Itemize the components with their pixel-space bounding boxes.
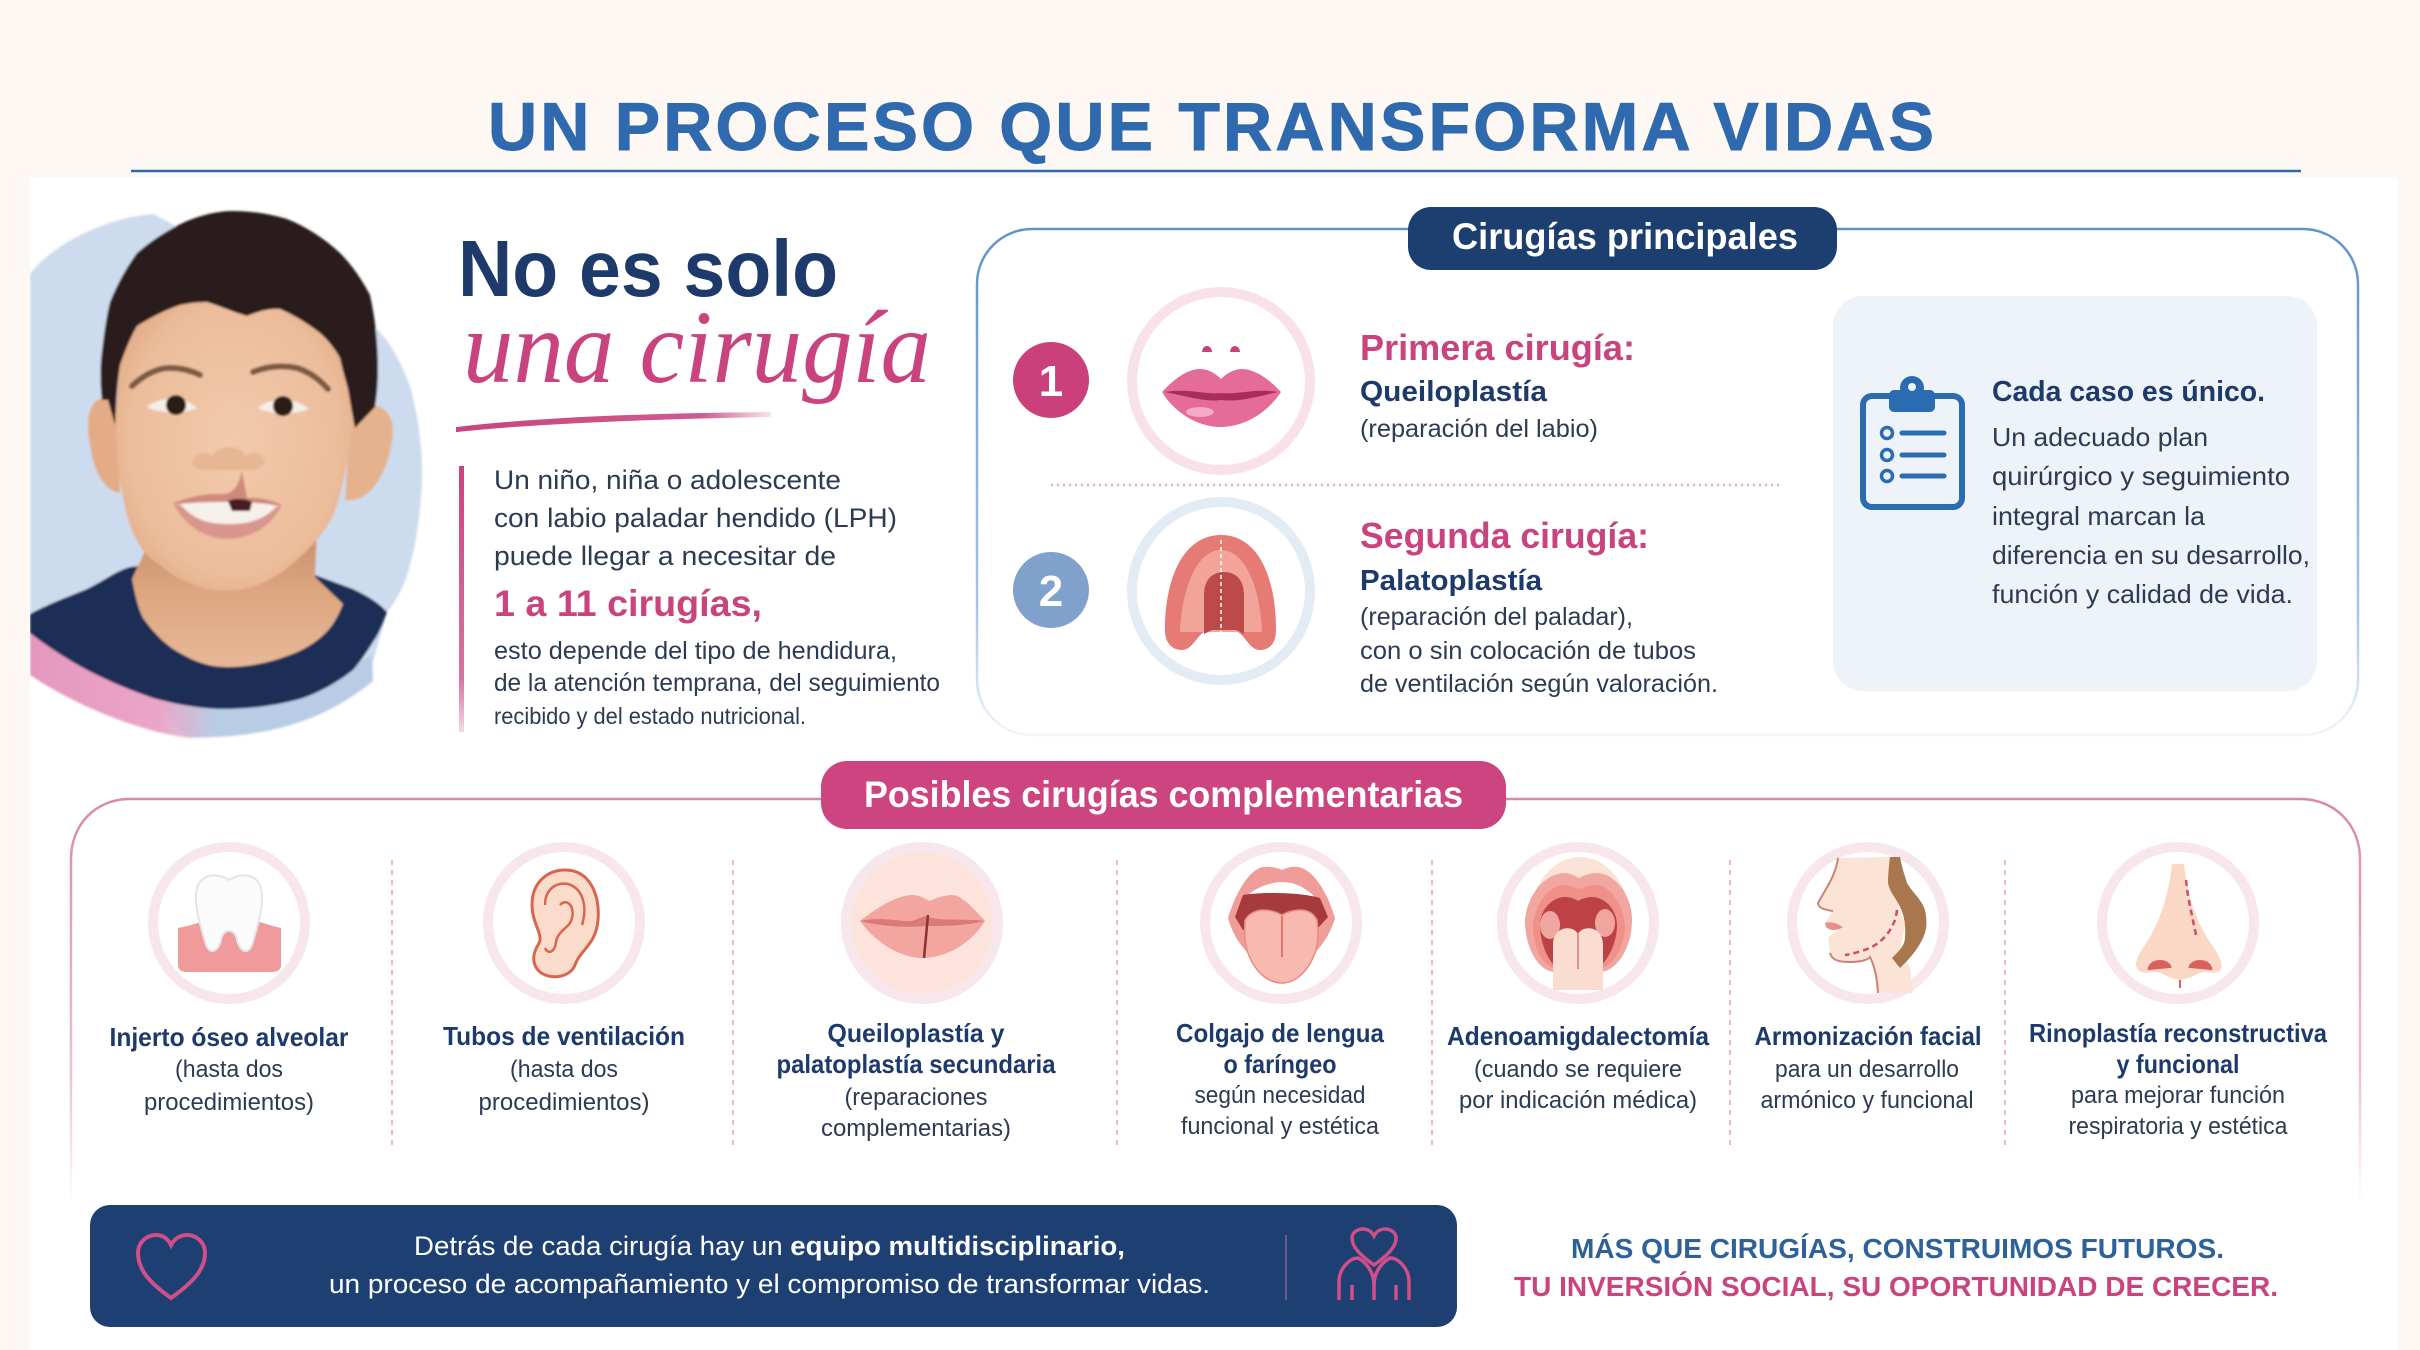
description: (cuando se requiere: [1474, 1056, 1682, 1083]
item: queiloplastía y palatoplastía secundaria: [776, 847, 1056, 1142]
number badge 2: 2: [1039, 567, 1063, 616]
label: [1176, 1018, 1384, 1079]
label: [776, 1018, 1056, 1079]
intro text: recibido y del estado nutricional.: [494, 703, 806, 729]
text: primera cirugía: Queiloplastía: [1360, 376, 1548, 408]
description: procedimientos): [478, 1089, 650, 1116]
callout text: diferencia en su desarrollo,: [1992, 540, 2310, 570]
label: y funcional: [2116, 1049, 2240, 1079]
lower brush stroke: [182, 656, 374, 738]
description: procedimientos): [144, 1089, 314, 1116]
right ear: [345, 405, 393, 500]
pink brush stroke: [30, 632, 206, 739]
text: primera cirugía: Primera cirugía:: [1360, 327, 1635, 368]
description: complementarias): [821, 1115, 1011, 1142]
panel: cirugías principales: [977, 207, 2358, 735]
panel header pill: Cirugías principales: [1452, 216, 1798, 257]
text: segunda cirugía: [1360, 515, 1718, 698]
item: rinoplastía reconstructiva y funcional: [2029, 847, 2327, 1140]
description: [2068, 1082, 2288, 1140]
icon: throat and tonsils: [1502, 847, 1654, 999]
icon: palate: [1132, 502, 1310, 680]
item: armonización facial: [1754, 847, 1982, 1114]
closing tagline: MÁS QUE CIRUGÍAS, CONSTRUIMOS FUTUROS.: [1571, 1233, 2224, 1264]
banner text: Detrás de cada cirugía hay un equipo multidisciplinario,: [414, 1231, 1125, 1261]
text: primera cirugía: [1360, 327, 1635, 443]
panel: posibles cirugías complementarias: [71, 761, 2360, 1204]
text: segunda cirugía: Segunda cirugía:: [1360, 515, 1649, 556]
item: colgajo de lengua o faríngeo: [1176, 847, 1384, 1140]
description: [1181, 1082, 1380, 1140]
callout text: Cada caso es único.: [1992, 376, 2265, 408]
text: segunda cirugía: con o sin colocación de tubos: [1360, 637, 1696, 665]
description: funcional y estética: [1181, 1113, 1380, 1140]
description: según necesidad: [1194, 1082, 1366, 1109]
icon: clipboard: [1863, 376, 1962, 507]
heading underline swoosh: [457, 413, 770, 431]
callout text: función y calidad de vida.: [1992, 579, 2293, 609]
shirt: [30, 565, 387, 709]
label: palatoplastía secundaria: [776, 1049, 1056, 1079]
heading: No es solo: No es solo: [458, 224, 838, 313]
description: respiratoria y estética: [2068, 1113, 2288, 1140]
label: Injerto óseo alveolar: [110, 1022, 348, 1052]
number badge 2: [1013, 552, 1089, 628]
nose: [192, 447, 265, 471]
mouth with cleft: [173, 471, 282, 539]
description: (reparaciones: [844, 1084, 988, 1111]
label: Armonización facial: [1754, 1021, 1982, 1051]
description: para un desarrollo: [1775, 1056, 1959, 1083]
intro text: de la atención temprana, del seguimiento: [494, 669, 940, 697]
label: Tubos de ventilación: [443, 1021, 685, 1051]
neck: [132, 530, 343, 667]
label: [2029, 1018, 2327, 1079]
intro text: con labio paladar hendido (LPH): [494, 503, 897, 533]
text: segunda cirugía: de ventilación según valoración.: [1360, 670, 1718, 698]
description: [821, 1084, 1011, 1142]
callout text: [1992, 376, 2310, 609]
left ear: [88, 398, 120, 493]
face: [116, 290, 353, 591]
description: [1459, 1056, 1697, 1114]
panel outline: [977, 229, 2358, 735]
intro text: 1 a 11 cirugías,: [494, 583, 762, 624]
description: [1760, 1056, 1974, 1114]
icon: ear: [488, 847, 640, 999]
callout text: Un adecuado plan: [1992, 422, 2208, 452]
eyebrows: [132, 366, 328, 389]
callout text: integral marcan la: [1992, 501, 2206, 531]
text: primera cirugía: (reparación del labio): [1360, 415, 1598, 443]
eyes: [147, 395, 309, 416]
banner text: [329, 1231, 1210, 1299]
number badge 1: [1013, 342, 1089, 418]
number badge 1: 1: [1039, 357, 1063, 406]
description: [478, 1056, 650, 1116]
text: segunda cirugía: Palatoplastía: [1360, 565, 1543, 597]
description: (hasta dos: [510, 1056, 618, 1083]
description: (hasta dos: [175, 1056, 283, 1083]
brush background: [30, 214, 422, 737]
description: armónico y funcional: [1760, 1087, 1974, 1114]
banner text: un proceso de acompañamiento y el compromiso de transformar vidas.: [329, 1269, 1210, 1299]
heading: una cirugía: una cirugía: [463, 290, 931, 405]
text: segunda cirugía: (reparación del paladar),: [1360, 603, 1633, 631]
photo: smiling boy with cleft lip: [30, 211, 422, 738]
item: adenoamigdalectomía: [1447, 847, 1709, 1114]
label: Queiloplastía y: [828, 1018, 1005, 1048]
icon: heart: [138, 1235, 205, 1298]
description: [144, 1056, 314, 1116]
accent bar: [459, 466, 464, 732]
description: por indicación médica): [1459, 1087, 1697, 1114]
icon: tongue: [1205, 847, 1357, 999]
banner: equipo multidisciplinario: [90, 1205, 1457, 1327]
label: o faríngeo: [1224, 1049, 1336, 1079]
icon: lips: [1132, 292, 1310, 470]
icon: repaired lips: [846, 847, 998, 999]
title underline: [131, 170, 2301, 172]
icon: tooth: [153, 847, 305, 999]
panel header pill: [1408, 207, 1837, 270]
intro text: puede llegar a necesitar de: [494, 541, 836, 571]
intro text: esto depende del tipo de hendidura,: [494, 637, 897, 665]
callout: cada caso es único: [1833, 296, 2317, 691]
panel outline: [71, 799, 2360, 1204]
item: tubos de ventilación: [443, 847, 685, 1116]
panel header pill: [821, 761, 1506, 829]
icon: facial profile: [1792, 847, 1944, 999]
closing tagline: TU INVERSIÓN SOCIAL, SU OPORTUNIDAD DE CRECER.: [1514, 1271, 2278, 1302]
item: injerto óseo alveolar: [110, 847, 348, 1116]
title: UN PROCESO QUE TRANSFORMA VIDAS: [488, 89, 1934, 165]
intro text: Un niño, niña o adolescente: [494, 465, 841, 495]
panel header pill: Posibles cirugías complementarias: [864, 774, 1463, 815]
icon: nose: [2102, 847, 2254, 999]
icon: people with heart: [1339, 1229, 1409, 1300]
intro text: [494, 465, 940, 729]
closing tagline: [1514, 1233, 2278, 1302]
hair: [100, 211, 378, 428]
label: Colgajo de lengua: [1176, 1018, 1384, 1048]
description: para mejorar función: [2071, 1082, 2285, 1109]
label: Rinoplastía reconstructiva: [2029, 1018, 2327, 1048]
callout text: quirúrgico y seguimiento: [1992, 461, 2290, 491]
label: Adenoamigdalectomía: [1447, 1021, 1709, 1051]
